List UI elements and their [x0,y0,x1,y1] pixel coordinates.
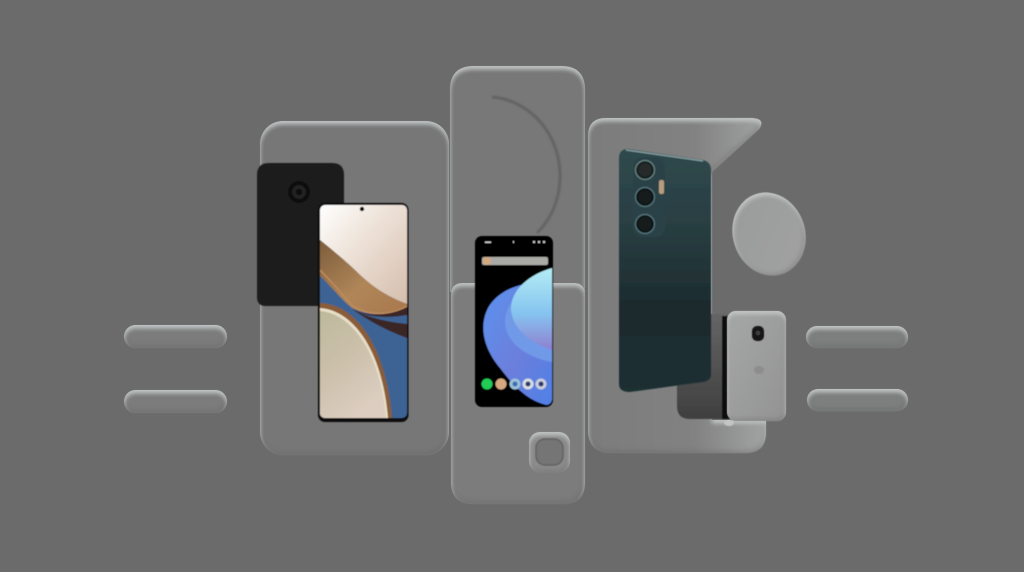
bar: left lower [124,390,227,413]
lens 3 [636,214,654,234]
search bar [482,257,548,265]
phone: teal back with triple camera [619,149,711,392]
phone: small dark back [677,314,730,419]
phone: small light back [727,311,786,421]
front camera hole [360,207,364,211]
phone: front with wallpaper [318,203,408,422]
app icons [482,378,546,390]
circle disc [722,183,816,285]
lens 2 [636,188,654,206]
camera island [633,157,665,237]
icon: rounded square button [529,432,570,472]
logo [754,366,764,374]
bar: right upper [806,326,908,348]
status bar [485,241,545,243]
panel: left [260,121,449,455]
camera [752,326,764,341]
icon: camera lens [288,181,310,203]
flash [659,180,664,194]
panel: right with triangular top [588,118,766,453]
panel: center lower [451,283,585,504]
panel: center upper [450,66,585,292]
phone: center with blue wallpaper [475,236,553,407]
bar: left upper [124,325,227,348]
illustration: phones on sculpted panels [124,66,908,504]
phone: black back [257,163,344,306]
bar: right lower [807,389,908,411]
lens 1 [636,160,654,180]
crescent arc [492,97,560,233]
notch under light phone [724,420,734,426]
